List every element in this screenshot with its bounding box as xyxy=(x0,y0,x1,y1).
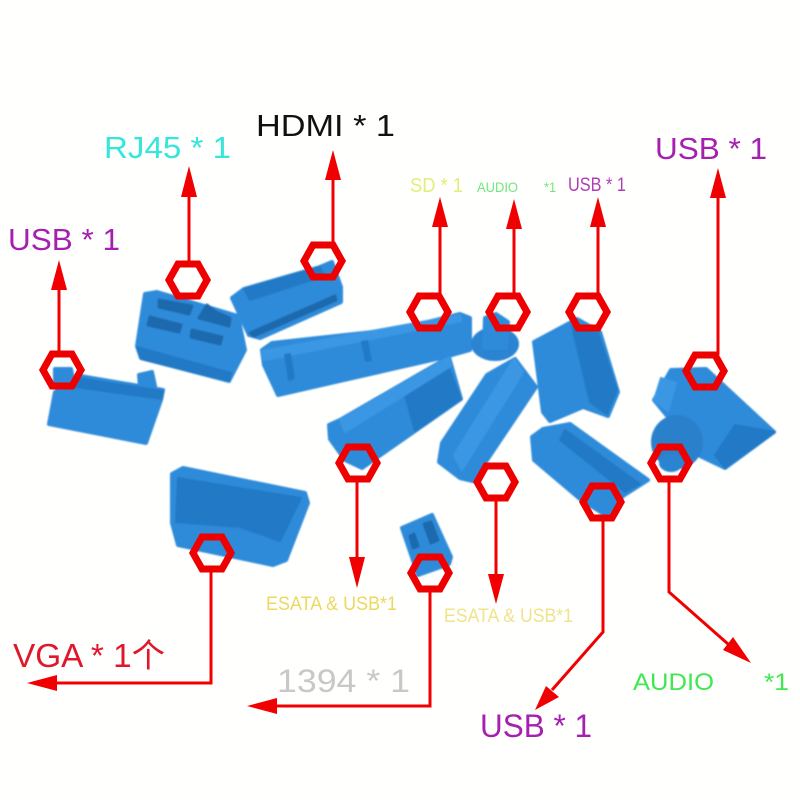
callout: HDMI: HDMI * 1 xyxy=(256,108,395,143)
plug: VGA xyxy=(172,468,308,565)
plug: AUDIO top xyxy=(471,314,519,361)
callout: USB bottom xyxy=(480,486,621,744)
callout: AUDIO top xyxy=(477,179,556,328)
callout: VGA: VGA * 1个 xyxy=(13,637,165,674)
plug: RJ45 xyxy=(137,292,245,381)
callout: USB right xyxy=(655,131,767,387)
callout: ESATA and USB center: ESATA & USB*1 xyxy=(444,606,573,627)
plug: AUDIO lower xyxy=(651,415,703,472)
plug: HDMI xyxy=(232,262,341,338)
callout: ESATA and USB left xyxy=(266,447,397,615)
callout: AUDIO lower xyxy=(633,447,789,696)
plug: USB upper right xyxy=(534,319,618,421)
callout: RJ45 xyxy=(104,130,231,296)
callout: RJ45: RJ45 * 1 xyxy=(104,130,231,165)
plug: USB right xyxy=(654,369,775,468)
callout: USB bottom: USB * 1 xyxy=(480,708,592,744)
callout: VGA xyxy=(13,537,231,691)
callout: AUDIO lower: AUDIO xyxy=(633,669,714,696)
plug: ESATA center xyxy=(439,359,536,481)
callout: AUDIO lower: *1 xyxy=(764,669,789,696)
callout: HDMI xyxy=(256,108,395,277)
callout: AUDIO top: *1 xyxy=(544,179,556,195)
callout: AUDIO top: AUDIO xyxy=(477,179,518,195)
callout: ESATA and USB left: ESATA & USB*1 xyxy=(266,594,397,615)
callout: ESATA and USB center xyxy=(444,466,573,627)
plug: USB left xyxy=(49,369,163,443)
callout: 1394 xyxy=(247,557,449,714)
plug: long bar SD xyxy=(262,314,470,395)
callout: SD: SD * 1 xyxy=(410,175,463,197)
plug: ESATA left xyxy=(329,357,461,468)
photo: blue port plugs xyxy=(49,262,775,575)
callout: SD xyxy=(410,175,463,328)
callout: USB top: USB * 1 xyxy=(568,175,626,196)
callout: USB top xyxy=(568,175,626,328)
callout: 1394: 1394 * 1 xyxy=(277,663,410,699)
plug: 1394 xyxy=(402,515,451,575)
plug: USB lower xyxy=(532,424,648,516)
callout: USB left xyxy=(8,222,120,386)
callout: USB left: USB * 1 xyxy=(8,222,120,257)
callout: USB right: USB * 1 xyxy=(655,131,767,166)
